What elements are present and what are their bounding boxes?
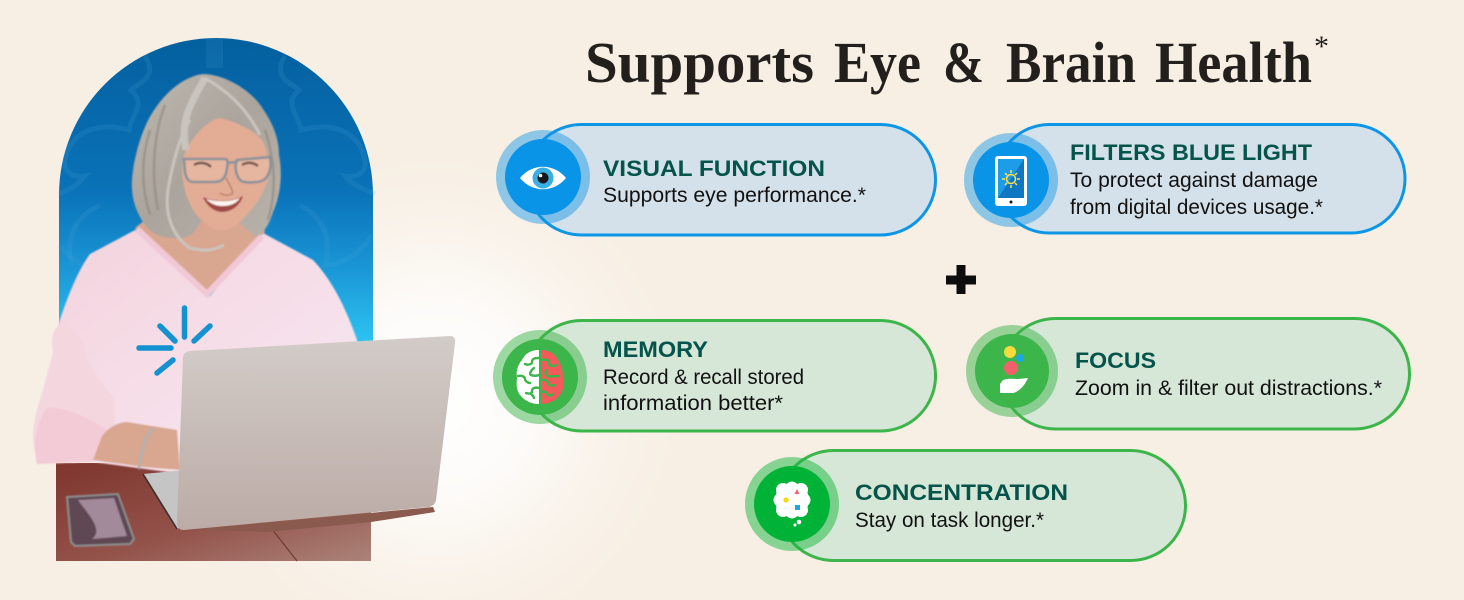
neck <box>135 200 265 296</box>
title: Supports <box>585 30 814 95</box>
text: concentration: CONCENTRATION <box>855 480 1068 505</box>
arm and hand <box>93 422 180 470</box>
pill: focus <box>966 318 1410 429</box>
text: visual function: VISUAL FUNCTION <box>603 156 825 181</box>
title: Health <box>1155 30 1312 95</box>
face <box>182 118 269 230</box>
text: focus <box>1075 348 1382 400</box>
text: memory: information better* <box>603 392 783 415</box>
pill: filters blue light <box>964 124 1405 233</box>
title <box>585 30 1329 95</box>
table <box>56 463 435 561</box>
blue spark accent <box>139 308 210 373</box>
pill: concentration <box>745 450 1186 560</box>
icon: tablet with sun <box>995 156 1027 206</box>
pill: memory <box>493 320 936 431</box>
phone <box>67 494 134 546</box>
text: focus: Zoom in & filter out distractions.* <box>1075 377 1382 400</box>
title: Eye <box>834 30 921 95</box>
plus sign <box>946 265 976 294</box>
bracelet <box>139 429 153 470</box>
woman <box>33 74 362 475</box>
sweater collar <box>137 229 262 294</box>
text: concentration: Stay on task longer.* <box>855 509 1044 532</box>
title: Brain <box>1006 30 1136 95</box>
text: memory: Record & recall stored <box>603 366 804 389</box>
hair <box>132 74 281 238</box>
text: filters blue light: FILTERS BLUE LIGHT <box>1070 140 1313 165</box>
glasses <box>184 157 271 182</box>
laptop <box>143 336 455 530</box>
blue arch with brain pattern <box>59 38 375 345</box>
title: & <box>943 30 984 95</box>
text: visual function: Supports eye performance.* <box>603 184 866 207</box>
pill: visual function <box>496 124 936 235</box>
sweater <box>33 229 362 475</box>
icon: hand with floating dots <box>1000 346 1028 393</box>
photo: woman at laptop in front of blue arch <box>33 38 455 561</box>
icon: eye <box>520 167 566 189</box>
text: visual function <box>603 156 866 207</box>
icon: thought cloud <box>774 482 810 526</box>
text: filters blue light <box>1070 140 1323 219</box>
text: memory: MEMORY <box>603 337 708 362</box>
text: focus: FOCUS <box>1075 348 1156 373</box>
text: filters blue light: To protect against damage <box>1070 169 1318 192</box>
title: * <box>1314 30 1329 63</box>
text: concentration <box>855 480 1068 532</box>
hair strands <box>143 78 274 250</box>
text: filters blue light: from digital devices usage.* <box>1070 196 1323 219</box>
icon: brain <box>517 350 563 404</box>
text: memory <box>603 337 804 415</box>
